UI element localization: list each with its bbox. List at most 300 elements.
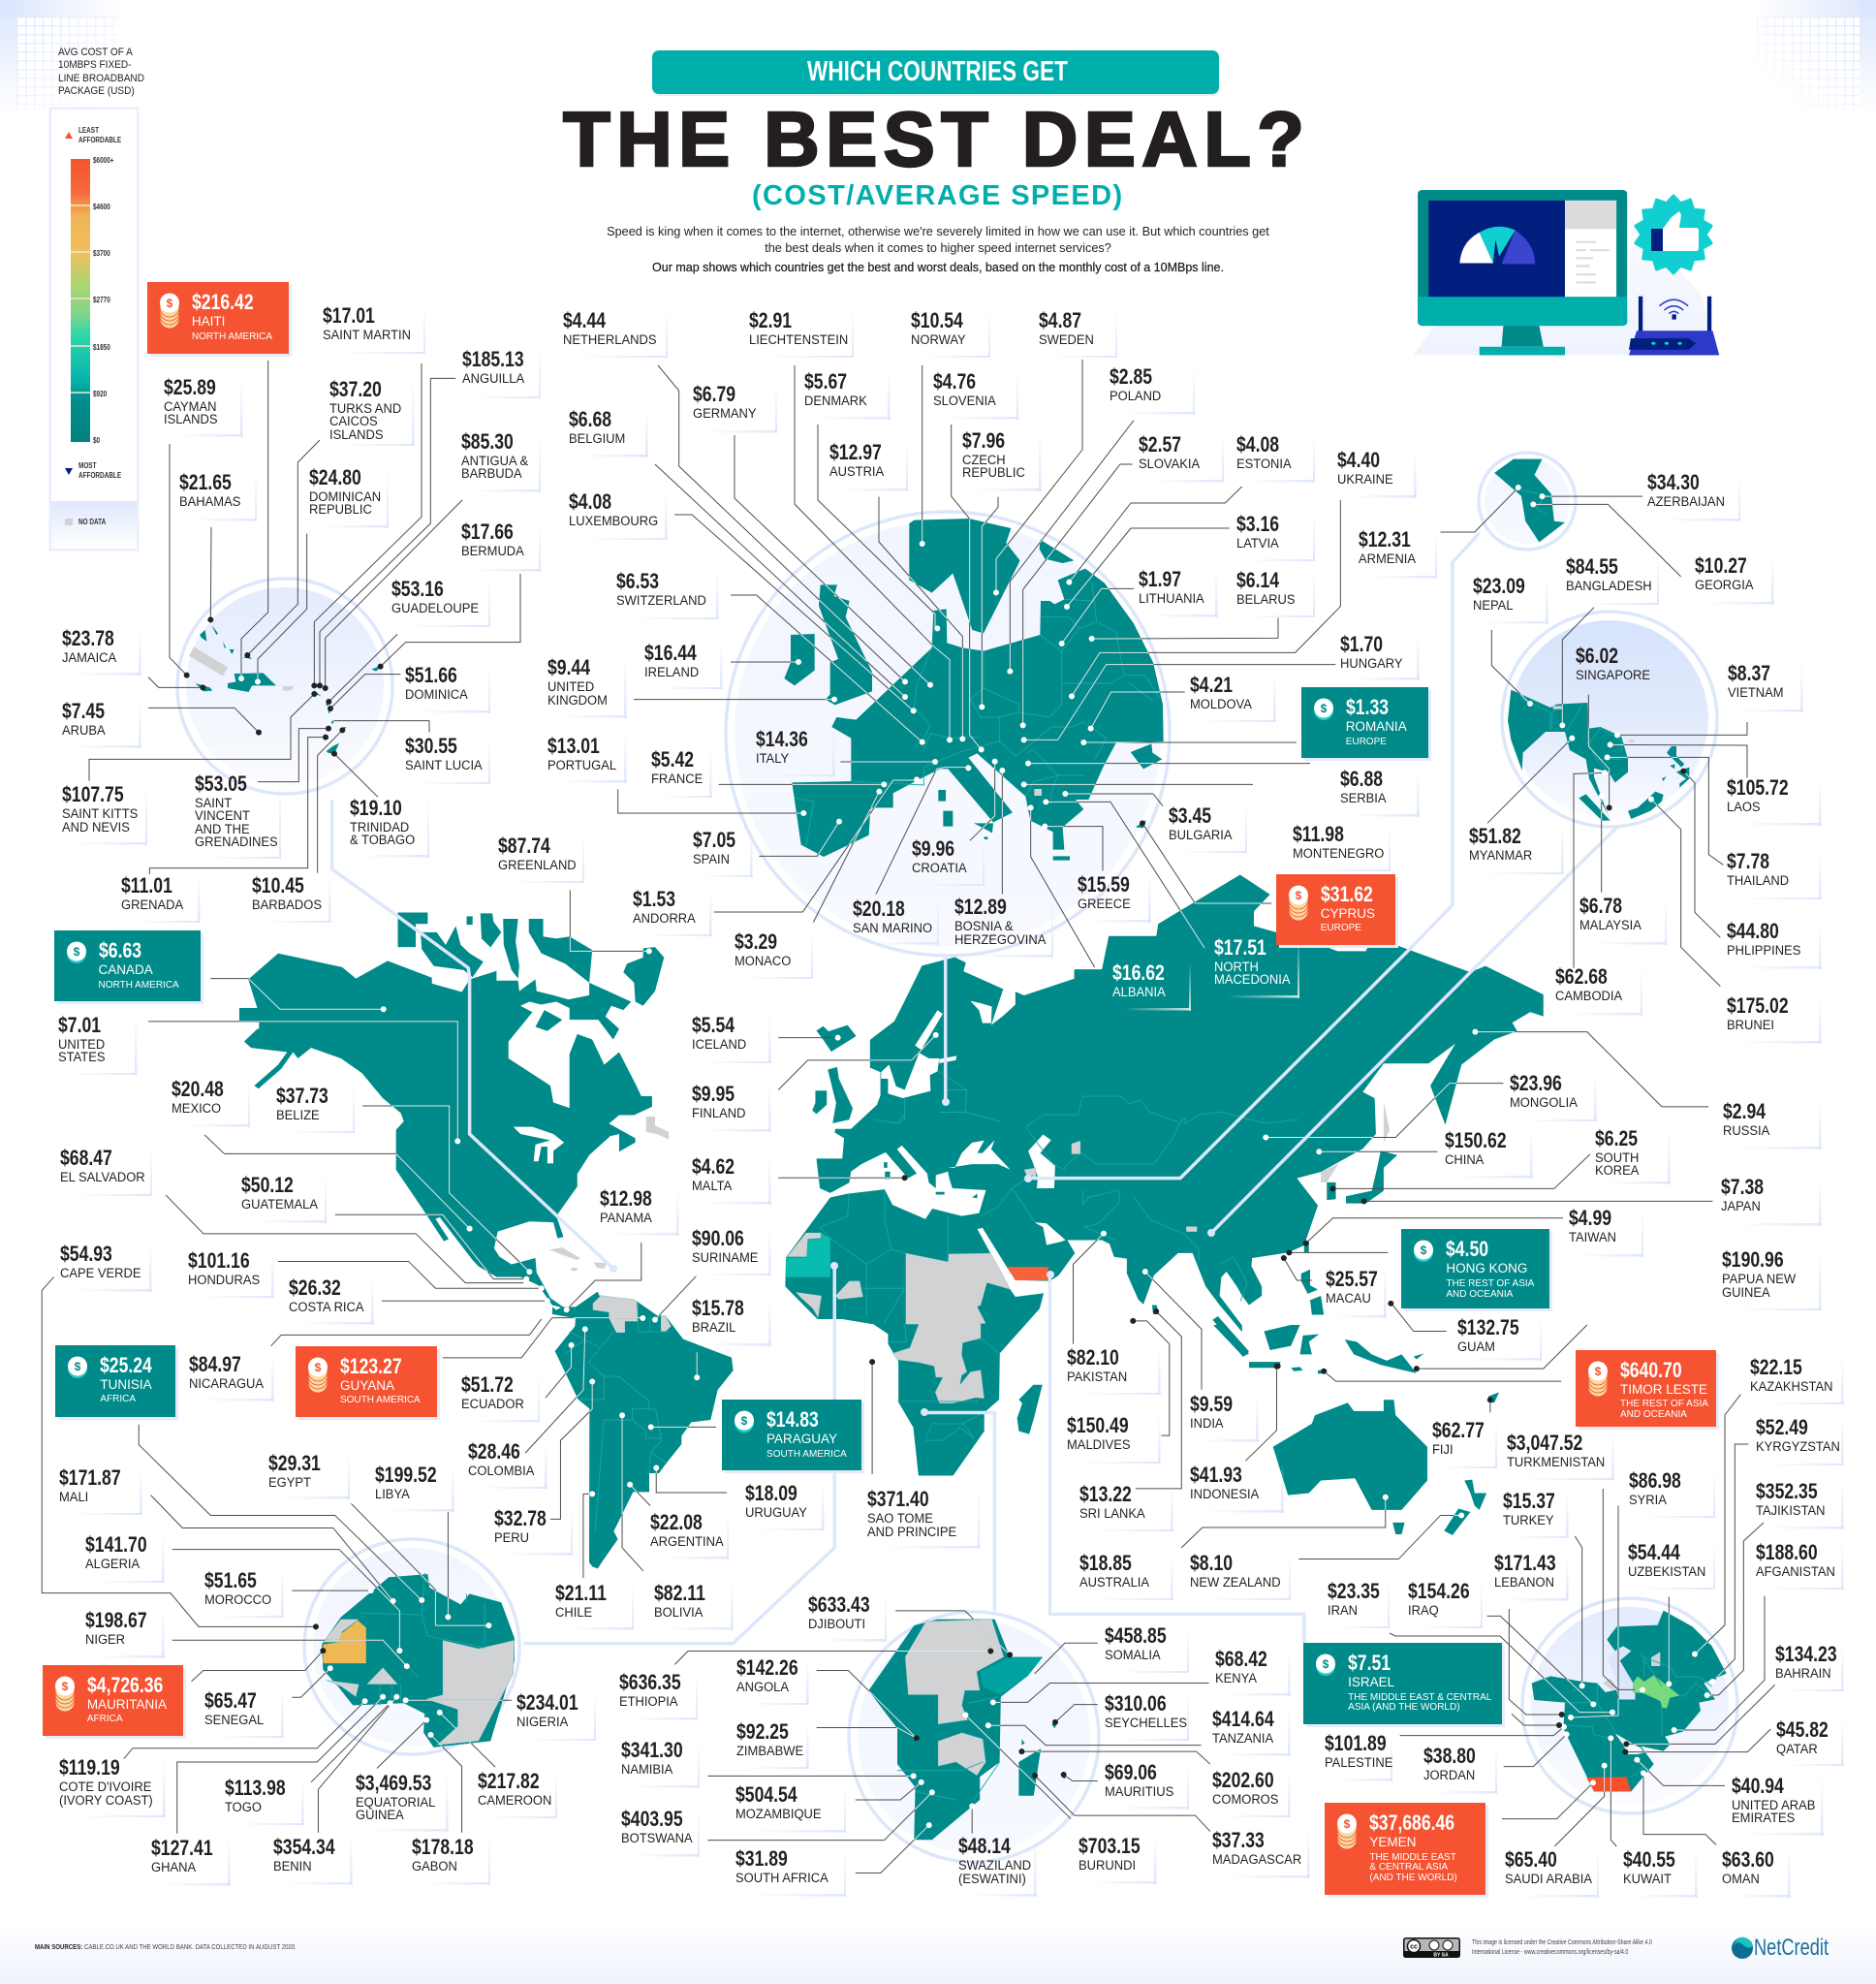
legend heading — [58, 47, 144, 97]
label: Vietnam: VIETNAM — [1728, 685, 1783, 700]
label: Indonesia: INDONESIA — [1190, 1487, 1260, 1501]
callout: Israel: ASIA (AND THE WORLD) — [1348, 1702, 1460, 1713]
label: Germany: GERMANY — [693, 406, 756, 421]
label: Comoros — [1212, 1770, 1291, 1817]
label: Nigeria: $234.01 — [516, 1690, 578, 1715]
label: Uruguay: URUGUAY — [745, 1505, 807, 1520]
label: Myanmar — [1469, 826, 1564, 874]
label: Libya: $199.52 — [375, 1463, 437, 1487]
callout: Haiti — [147, 282, 289, 354]
router — [1629, 297, 1719, 355]
label: Philippines — [1727, 921, 1822, 969]
label: Russia — [1723, 1101, 1822, 1149]
label: Nicaragua — [189, 1354, 274, 1401]
callout: Mauritania — [43, 1665, 183, 1736]
label: Cote d'Ivoire: (IVORY COAST) — [59, 1793, 153, 1808]
label: Panama: $12.98 — [600, 1186, 652, 1211]
callout: Mauritania: AFRICA — [87, 1714, 122, 1724]
label: Latvia — [1236, 514, 1315, 561]
label: United States: STATES — [58, 1050, 105, 1064]
label: Malta: $4.62 — [692, 1154, 735, 1179]
label: Dominican Republic: DOMINICAN — [309, 489, 381, 504]
label: United Kingdom: KINGDOM — [547, 693, 608, 708]
label: Papua New Guinea: PAPUA NEW — [1722, 1272, 1796, 1286]
label: Suriname — [692, 1228, 771, 1275]
label: Australia: $18.85 — [1079, 1551, 1132, 1575]
label: San Marino — [853, 898, 939, 945]
label: Cambodia — [1555, 966, 1642, 1016]
label: Slovenia: SLOVENIA — [933, 394, 996, 408]
label: Turks and Caicos: ISLANDS — [329, 427, 383, 442]
label: Sao Tome and Principe: SAO TOME — [867, 1511, 933, 1526]
callout: Guyana — [296, 1346, 437, 1417]
label: Mauritius — [1105, 1762, 1189, 1810]
label: Sao Tome and Principe: $371.40 — [867, 1487, 929, 1511]
label: Saint Kitts and Nevis: SAINT KITTS — [62, 806, 138, 821]
label: Saint Lucia: $30.55 — [405, 734, 457, 758]
label: Vietnam: $8.37 — [1728, 661, 1770, 685]
label: Spain: SPAIN — [693, 852, 730, 866]
label: Greece — [1078, 874, 1151, 923]
label: Mexico: MEXICO — [172, 1101, 221, 1116]
label: Malaysia: $6.78 — [1579, 894, 1622, 918]
label: Equatorial Guinea — [356, 1773, 449, 1832]
label: Armenia: ARMENIA — [1359, 551, 1416, 566]
label: Burundi: BURUNDI — [1079, 1858, 1136, 1873]
label: Tajikistan: TAJIKISTAN — [1756, 1503, 1826, 1518]
legend panel — [51, 110, 137, 549]
label: Argentina — [650, 1512, 729, 1559]
label: Swaziland: (ESWATINI) — [958, 1872, 1026, 1886]
callout: Mauritania: MAURITANIA — [87, 1697, 167, 1712]
label: Syria: SYRIA — [1629, 1493, 1667, 1507]
label: Fiji: $62.77 — [1432, 1418, 1485, 1442]
label: Taiwan — [1569, 1208, 1643, 1257]
legend text: most affordable: MOST — [78, 461, 96, 470]
label: Bulgaria: BULGARIA — [1169, 828, 1232, 842]
label: Latvia: $3.16 — [1236, 512, 1279, 536]
label: Iceland: $5.54 — [692, 1013, 735, 1037]
label: Madagascar: MADAGASCAR — [1212, 1852, 1301, 1867]
label: Peru: $32.78 — [494, 1506, 547, 1530]
label: Libya — [375, 1464, 453, 1512]
label: Ethiopia: ETHIOPIA — [619, 1694, 677, 1709]
label: Kuwait: KUWAIT — [1623, 1872, 1672, 1886]
callout: Timor Leste: AND OCEANIA — [1620, 1409, 1687, 1420]
label: Trinidad and Tobago: TRINIDAD — [350, 820, 409, 835]
label: Norway: $10.54 — [911, 308, 963, 332]
label: Mali — [59, 1467, 142, 1515]
label: Argentina: $22.08 — [650, 1510, 703, 1534]
label: Netherlands: NETHERLANDS — [563, 332, 657, 347]
label: New Zealand: NEW ZEALAND — [1190, 1575, 1281, 1590]
callout: Haiti: HAITI — [192, 314, 225, 329]
label: Saint Lucia — [405, 736, 490, 784]
banner text: WHICH COUNTRIES GET — [807, 56, 1068, 87]
label: Bulgaria: $3.45 — [1169, 803, 1211, 828]
label: Panama: PANAMA — [600, 1211, 652, 1225]
label: Albania — [1112, 962, 1191, 1011]
label: Austria: AUSTRIA — [829, 464, 884, 479]
creative commons badge: cc — [1410, 1944, 1418, 1950]
license text: International License - www.creativecommons.org/licenses/by-sa/4.0 — [1472, 1947, 1628, 1956]
callout: Cyprus: CYPRUS — [1321, 906, 1375, 921]
label: Oman: OMAN — [1722, 1872, 1760, 1886]
callout: Canada: $ — [73, 945, 79, 959]
map: highlighted countries — [786, 1233, 1048, 1280]
legend ticks: $920 — [93, 390, 107, 398]
label: Sri Lanka — [1079, 1484, 1173, 1531]
label: Equatorial Guinea: EQUATORIAL — [356, 1795, 436, 1810]
callout: Yemen: THE MIDDLE EAST — [1369, 1852, 1456, 1863]
label: Germany — [693, 384, 777, 433]
label: Angola: ANGOLA — [736, 1680, 789, 1694]
label: Sao Tome and Principe — [867, 1489, 980, 1549]
callout: Tunisia: $25.24 — [100, 1353, 152, 1377]
label: Ireland: IRELAND — [644, 665, 699, 679]
label: Mauritius: MAURITIUS — [1105, 1784, 1173, 1799]
label: Ecuador: ECUADOR — [461, 1397, 524, 1411]
label: El Salvador: $68.47 — [60, 1146, 112, 1170]
label: Andorra: ANDORRA — [633, 911, 696, 926]
label: Afghanistan — [1756, 1542, 1844, 1590]
label: Mexico: $20.48 — [172, 1077, 223, 1101]
license text: This image is licensed under the Creative Commons Attribution-Share Alike 4.0 — [1472, 1937, 1652, 1946]
label: Burundi — [1079, 1836, 1157, 1884]
callout: Yemen: YEMEN — [1369, 1835, 1416, 1849]
label: Ghana — [151, 1838, 231, 1886]
label: Saint Vincent: SAINT — [195, 796, 232, 810]
label: United States — [58, 1015, 138, 1075]
connector lines outside the map — [42, 360, 1775, 1874]
label: Mongolia — [1510, 1073, 1597, 1121]
label: Slovakia: SLOVAKIA — [1139, 457, 1201, 471]
label: Albania: $16.62 — [1112, 961, 1164, 985]
map: Great Lakes — [514, 1127, 564, 1163]
label: Benin — [273, 1837, 353, 1885]
label: Nepal — [1473, 576, 1548, 624]
label: Guatemala — [241, 1175, 327, 1223]
callout: Paraguay: SOUTH AMERICA — [766, 1449, 847, 1460]
label: Thailand: $7.78 — [1727, 849, 1769, 873]
legend text: no data: NO DATA — [78, 518, 106, 526]
label: United Arab Emirates — [1732, 1776, 1824, 1836]
label: Bolivia: $82.11 — [654, 1581, 705, 1605]
label: Montenegro: $11.98 — [1293, 822, 1344, 846]
callout: Hong Kong: HONG KONG — [1446, 1261, 1527, 1275]
inset circle: East Africa — [849, 1612, 1099, 1862]
world map — [239, 874, 1544, 1568]
label: Belgium: $6.68 — [569, 407, 611, 431]
label: Bahrain: $134.23 — [1775, 1642, 1837, 1666]
label: Malaysia: MALAYSIA — [1579, 918, 1642, 932]
legend colour bar — [65, 132, 90, 475]
label: Zimbabwe — [736, 1721, 809, 1769]
thick connectors from insets to map — [332, 533, 1617, 1644]
label: Ecuador — [461, 1374, 540, 1423]
label: Bolivia: BOLIVIA — [654, 1605, 704, 1620]
label: Egypt: EGYPT — [268, 1475, 310, 1490]
callout: Canada: NORTH AMERICA — [99, 980, 179, 991]
label: Antigua and Barbuda — [461, 431, 541, 492]
label: Cape Verde: $54.93 — [60, 1242, 112, 1266]
label: Mongolia: $23.96 — [1510, 1071, 1561, 1095]
label: Nepal: NEPAL — [1473, 598, 1514, 613]
label: Italy: ITALY — [756, 751, 789, 766]
label: Somalia: SOMALIA — [1105, 1648, 1160, 1662]
label: Fiji — [1432, 1420, 1497, 1468]
label: Liechtenstein: $2.91 — [749, 308, 793, 332]
label: Aruba: $7.45 — [62, 699, 105, 723]
label: Andorra — [633, 889, 712, 936]
label: Seychelles: SEYCHELLES — [1105, 1716, 1187, 1730]
label: Macau: $25.57 — [1326, 1267, 1378, 1291]
label: Colombia — [468, 1441, 547, 1489]
label: United Kingdom: UNITED — [547, 679, 594, 694]
label: Egypt: $29.31 — [268, 1451, 320, 1475]
label: Qatar: $45.82 — [1776, 1717, 1829, 1742]
legend text: least affordable: AFFORDABLE — [78, 136, 121, 144]
label: India — [1190, 1394, 1259, 1442]
label: Namibia: $341.30 — [621, 1738, 682, 1762]
label: Mozambique: MOZAMBIQUE — [735, 1807, 821, 1821]
callout: Romania: EUROPE — [1346, 737, 1387, 747]
label: South Korea: $6.25 — [1595, 1126, 1638, 1150]
label: Ghana: GHANA — [151, 1860, 196, 1874]
label: Bangladesh — [1566, 556, 1659, 605]
legend text: least affordable — [78, 126, 121, 144]
label: Peru: PERU — [494, 1530, 529, 1545]
label: Nigeria: NIGERIA — [516, 1715, 569, 1729]
label: Uzbekistan: $54.44 — [1628, 1540, 1680, 1564]
label: Trinidad and Tobago: $19.10 — [350, 796, 402, 820]
callout: Timor Leste — [1576, 1350, 1716, 1427]
label: Nicaragua: $84.97 — [189, 1352, 241, 1376]
label: Austria — [829, 442, 908, 490]
label: Brazil: BRAZIL — [692, 1320, 736, 1335]
label: Australia — [1079, 1553, 1173, 1600]
intro text: the best deals when it comes to higher speed internet services? — [765, 240, 1111, 254]
legend heading: AVG COST OF A — [58, 47, 133, 58]
label: Indonesia — [1190, 1464, 1284, 1513]
callout: Guyana: $ — [315, 1361, 322, 1374]
label: Algeria — [85, 1534, 165, 1583]
map: Europe, Africa and West Asia — [785, 936, 1262, 1475]
label: Djibouti — [808, 1594, 887, 1642]
callout: Hong Kong: $4.50 — [1446, 1237, 1488, 1261]
callout: Romania: $1.33 — [1346, 695, 1389, 719]
label: Belarus — [1236, 570, 1315, 617]
label: South Korea: SOUTH — [1595, 1150, 1640, 1165]
corner decoration top-right — [1755, 0, 1876, 114]
label: Chile — [555, 1583, 634, 1630]
label: China: CHINA — [1445, 1152, 1485, 1167]
label: Greece: $15.59 — [1078, 872, 1130, 897]
label: Togo: $113.98 — [225, 1776, 286, 1800]
label: Azerbaijan: AZERBAIJAN — [1647, 494, 1725, 509]
label: United States: UNITED — [58, 1037, 105, 1052]
label: Montenegro — [1293, 824, 1391, 871]
label: Andorra: $1.53 — [633, 887, 675, 911]
label: Russia: RUSSIA — [1723, 1123, 1769, 1138]
label: Argentina: ARGENTINA — [650, 1534, 724, 1549]
label: Saint Vincent: AND THE — [195, 822, 249, 836]
label: South Africa — [735, 1848, 846, 1897]
label: Singapore: SINGAPORE — [1576, 668, 1650, 682]
connector end caps — [610, 1098, 1215, 1416]
label: Iraq: $154.26 — [1408, 1579, 1470, 1603]
label: South Korea: KOREA — [1595, 1163, 1640, 1178]
label: Antigua and Barbuda: $85.30 — [461, 429, 514, 454]
label: Bosnia and Herzegovina: $12.89 — [954, 895, 1007, 919]
label: Iran: IRAN — [1328, 1603, 1358, 1618]
label: Barbados: BARBADOS — [252, 898, 323, 912]
label: New Zealand: $8.10 — [1190, 1551, 1234, 1575]
label: Guam — [1457, 1317, 1542, 1361]
label: Cameroon: CAMEROON — [478, 1793, 552, 1808]
label: Trinidad and Tobago: & TOBAGO — [350, 833, 415, 847]
label: Cambodia: CAMBODIA — [1555, 989, 1622, 1003]
callout: Guyana: SOUTH AMERICA — [340, 1395, 421, 1405]
label: Syria — [1629, 1470, 1715, 1518]
label: Tanzania: TANZANIA — [1212, 1731, 1273, 1746]
label: Aruba — [62, 701, 141, 748]
label: Chile: $21.11 — [555, 1581, 607, 1605]
label: Bangladesh: $84.55 — [1566, 554, 1618, 579]
label: Turkmenistan: TURKMENISTAN — [1507, 1455, 1605, 1469]
label: Saint Vincent: $53.05 — [195, 772, 246, 796]
label: Dominican Republic: REPUBLIC — [309, 502, 371, 517]
label: Belize: $37.73 — [276, 1084, 328, 1108]
intro text: Our map shows which countries get the best and worst deals, based on the monthly cost of a 10MBps line. — [652, 261, 1224, 274]
label: Estonia: ESTONIA — [1236, 457, 1292, 471]
label: Belgium — [569, 409, 647, 457]
label: New Zealand — [1190, 1553, 1291, 1600]
label: Palestine: $101.89 — [1325, 1731, 1387, 1755]
label: Jordan — [1423, 1746, 1497, 1793]
label: Sweden: SWEDEN — [1039, 332, 1094, 347]
label: Uruguay: $18.09 — [745, 1481, 797, 1505]
label: Antigua and Barbuda: ANTIGUA & — [461, 454, 528, 468]
label: Iceland — [692, 1015, 771, 1063]
label: Barbados: $10.45 — [252, 873, 304, 898]
callout: Cyprus: $31.62 — [1321, 882, 1373, 906]
label: Guatemala: GUATEMALA — [241, 1197, 318, 1212]
label: Turkey: TURKEY — [1503, 1513, 1554, 1527]
label: Ukraine: $4.40 — [1337, 448, 1380, 472]
label: Portugal: PORTUGAL — [547, 758, 616, 772]
label: Senegal: SENEGAL — [204, 1713, 264, 1727]
label: France: FRANCE — [651, 772, 703, 786]
label: Oman — [1722, 1849, 1791, 1898]
label: Ethiopia — [619, 1672, 698, 1720]
label: Saint Lucia: SAINT LUCIA — [405, 758, 483, 772]
label: Vietnam — [1728, 663, 1803, 712]
label: Nicaragua: NICARAGUA — [189, 1376, 264, 1391]
label: Dominica: DOMINICA — [405, 687, 468, 702]
label: Italy — [756, 729, 835, 776]
label: Iceland: ICELAND — [692, 1037, 746, 1052]
label: Swaziland: SWAZILAND — [958, 1858, 1031, 1873]
label: Suriname: SURINAME — [692, 1250, 759, 1265]
label: Estonia — [1236, 434, 1315, 483]
label: Sweden — [1039, 310, 1117, 358]
label: Lithuania: $1.97 — [1139, 567, 1181, 591]
label: Philippines: PHLIPPINES — [1727, 943, 1801, 958]
intro text — [607, 225, 1269, 274]
inset circle: Europe — [726, 512, 1170, 956]
label: Bosnia and Herzegovina: HERZEGOVINA — [954, 932, 1047, 947]
label: Malta — [692, 1156, 771, 1205]
label: Ireland — [644, 643, 723, 689]
label: Somalia: $458.85 — [1105, 1623, 1166, 1648]
map: South America — [552, 1292, 734, 1568]
label: Philippines: $44.80 — [1727, 919, 1779, 943]
label: Tanzania — [1212, 1709, 1291, 1756]
label: Russia: $2.94 — [1723, 1099, 1766, 1123]
callout: Mauritania: $ — [61, 1680, 68, 1693]
label: Greenland — [498, 835, 584, 883]
label: Cayman Islands: CAYMAN — [164, 399, 216, 414]
label: United Arab Emirates: EMIRATES — [1732, 1811, 1795, 1825]
label: Algeria: ALGERIA — [85, 1557, 140, 1571]
license text — [1472, 1937, 1652, 1956]
label: Seychelles — [1105, 1693, 1189, 1741]
label: Croatia — [912, 838, 985, 886]
callout: Cyprus: EUROPE — [1321, 923, 1361, 933]
callout: Hong Kong — [1401, 1229, 1549, 1308]
label: Pakistan — [1067, 1347, 1161, 1395]
label: Belgium: BELGIUM — [569, 431, 625, 446]
callout: Guyana: $123.27 — [340, 1354, 402, 1378]
label: Jordan: JORDAN — [1423, 1768, 1475, 1782]
inset circle: South East Asia — [1502, 612, 1717, 827]
label: Pakistan: $82.10 — [1067, 1345, 1119, 1370]
label: Costa Rica: COSTA RICA — [289, 1300, 363, 1314]
label: Guam: GUAM — [1457, 1339, 1495, 1354]
label: Lebanon: $171.43 — [1494, 1551, 1556, 1575]
label: Greece: GREECE — [1078, 897, 1131, 911]
label: Gabon — [412, 1837, 490, 1885]
legend ticks: $6000+ — [93, 156, 114, 165]
callout: Hong Kong: THE REST OF ASIA — [1446, 1278, 1534, 1289]
label: Guam: $132.75 — [1457, 1315, 1518, 1339]
label: Serbia: SERBIA — [1340, 791, 1386, 805]
label: Jamaica: JAMAICA — [62, 650, 116, 665]
label: Benin: $354.34 — [273, 1835, 335, 1859]
label: Mozambique — [735, 1784, 846, 1833]
label: Grenada: GRENADA — [121, 898, 183, 912]
label: Pakistan: PAKISTAN — [1067, 1370, 1128, 1384]
label: Morocco — [204, 1570, 284, 1618]
callout: Romania: $ — [1320, 702, 1327, 715]
label: Dominican Republic — [309, 467, 389, 528]
label: Cape Verde: CAPE VERDE — [60, 1266, 141, 1280]
callout: Romania — [1301, 687, 1428, 758]
legend text: most affordable: AFFORDABLE — [78, 471, 121, 480]
callout: Yemen: $ — [1344, 1817, 1351, 1831]
label: Belarus: BELARUS — [1236, 592, 1296, 607]
legend no data swatch — [65, 519, 73, 525]
label: Namibia — [621, 1740, 700, 1788]
label: Kyrgyzstan: $52.49 — [1756, 1415, 1808, 1439]
label: Georgia: $10.27 — [1695, 553, 1747, 578]
label: Bulgaria — [1169, 805, 1247, 853]
label: Hungary: $1.70 — [1340, 632, 1383, 656]
subtitle: (COST/AVERAGE SPEED) — [752, 180, 1124, 211]
label: Bolivia — [654, 1583, 734, 1630]
label: Denmark: DENMARK — [804, 394, 867, 408]
